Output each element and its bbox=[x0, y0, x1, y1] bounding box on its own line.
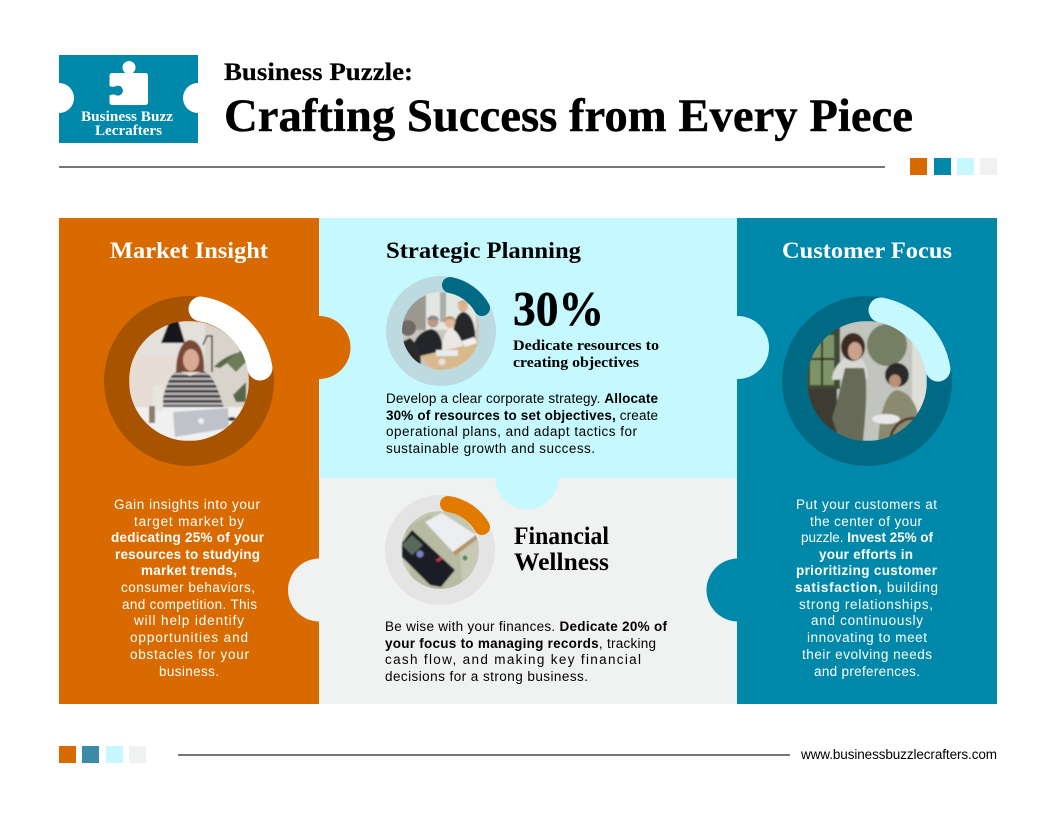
ring chart: market insight bbox=[116, 308, 262, 454]
puzzle knob: cyan down bbox=[496, 446, 558, 510]
photo: team meeting bbox=[400, 292, 480, 372]
body text: market insight: resources to studying bbox=[115, 547, 260, 562]
body text: customer focus: your efforts in bbox=[819, 547, 913, 562]
body text: market insight: consumer behaviors, bbox=[121, 580, 255, 595]
icon: puzzle piece bbox=[110, 61, 148, 105]
panel: customer focus bbox=[706, 218, 997, 704]
logo text bbox=[81, 109, 174, 139]
body text: customer focus: their evolving needs bbox=[802, 647, 932, 662]
body text: market insight: will help identify bbox=[133, 613, 244, 628]
body text: strategic planning: operational plans, and adapt tactics for bbox=[386, 424, 638, 439]
body text: customer focus bbox=[795, 497, 938, 679]
body text: strategic planning bbox=[386, 391, 658, 456]
body text: customer focus: and preferences. bbox=[814, 664, 920, 679]
stat caption: creating objectives bbox=[513, 355, 639, 371]
heading: financial wellness: Financial bbox=[514, 523, 609, 550]
ring chart: customer focus bbox=[794, 308, 940, 454]
body text: customer focus: the center of your bbox=[810, 514, 922, 529]
puzzle knob: orange right bbox=[288, 316, 350, 379]
footer website: www.businessbuzzlecrafters.com bbox=[800, 747, 997, 762]
body text: customer focus: puzzle. Invest 25% of bbox=[801, 530, 934, 545]
body text: financial wellness: Be wise with your finances. Dedicate 20% of bbox=[385, 619, 668, 634]
ring chart: financial wellness bbox=[393, 503, 487, 597]
body text: customer focus: innovating to meet bbox=[807, 630, 927, 645]
header divider line bbox=[59, 166, 885, 168]
body text: market insight: target market by bbox=[134, 514, 244, 529]
heading: customer focus: Customer Focus bbox=[782, 238, 952, 263]
puzzle knob: cyan right bbox=[706, 316, 769, 379]
body text: market insight: dedicating 25% of your bbox=[111, 530, 265, 545]
body text: customer focus: Put your customers at bbox=[796, 497, 937, 512]
photo: calculator and notepad bbox=[401, 511, 480, 590]
title block bbox=[224, 59, 913, 142]
photo: two women at a table bbox=[807, 321, 927, 441]
body text: financial wellness bbox=[385, 619, 668, 684]
body text: strategic planning: 30% of resources to set objectives, create bbox=[386, 408, 658, 423]
body text: customer focus: satisfaction, building bbox=[795, 580, 938, 595]
body text: strategic planning: Develop a clear corporate strategy. Allocate bbox=[386, 391, 658, 406]
subtitle: Business Puzzle: bbox=[224, 59, 413, 86]
logo text: Lecrafters bbox=[95, 123, 162, 139]
body text: market insight bbox=[111, 497, 265, 679]
body text: customer focus: prioritizing customer bbox=[796, 563, 938, 578]
puzzle knob: grey left bbox=[288, 558, 351, 622]
body text: financial wellness: your focus to managing records, tracking bbox=[385, 636, 656, 651]
body text: market insight: Gain insights into your bbox=[114, 497, 260, 512]
panel: strategic planning content bbox=[386, 238, 659, 456]
logo bbox=[59, 55, 198, 143]
body text: financial wellness: decisions for a strong business. bbox=[385, 669, 588, 684]
stat caption bbox=[513, 338, 659, 371]
body text: market insight: opportunities and bbox=[130, 630, 248, 645]
panel: strategic planning background bbox=[319, 218, 737, 478]
footer colour swatches bbox=[59, 746, 146, 763]
body text: customer focus: strong relationships, bbox=[799, 597, 933, 612]
heading: financial wellness: Wellness bbox=[514, 549, 609, 576]
body text: strategic planning: sustainable growth and success. bbox=[386, 441, 595, 456]
main title: Crafting Success from Every Piece bbox=[224, 90, 913, 142]
body text: market insight: obstacles for your bbox=[130, 647, 250, 662]
footer divider line bbox=[178, 754, 790, 756]
body text: financial wellness: cash flow, and making key financial bbox=[385, 652, 641, 667]
stat: 30%: 30% bbox=[513, 281, 604, 336]
header colour swatches bbox=[910, 158, 997, 175]
body text: market insight: business. bbox=[159, 664, 219, 679]
panel: market insight bbox=[59, 218, 351, 704]
puzzle knob: teal left bbox=[706, 558, 770, 622]
stat caption: Dedicate resources to bbox=[513, 338, 659, 354]
body text: customer focus: and continuously bbox=[811, 613, 923, 628]
heading: market insight: Market Insight bbox=[110, 238, 268, 263]
logo text: Business Buzz bbox=[81, 109, 174, 125]
panel: financial wellness content bbox=[385, 503, 668, 684]
photo: woman at laptop bbox=[129, 320, 249, 441]
body text: market insight: and competition. This bbox=[122, 597, 257, 612]
panel: financial wellness background bbox=[319, 478, 737, 704]
heading: financial wellness bbox=[514, 523, 609, 576]
heading: strategic planning: Strategic Planning bbox=[386, 238, 582, 263]
body text: market insight: market trends, bbox=[141, 563, 237, 578]
ring chart: strategic planning bbox=[394, 284, 488, 378]
